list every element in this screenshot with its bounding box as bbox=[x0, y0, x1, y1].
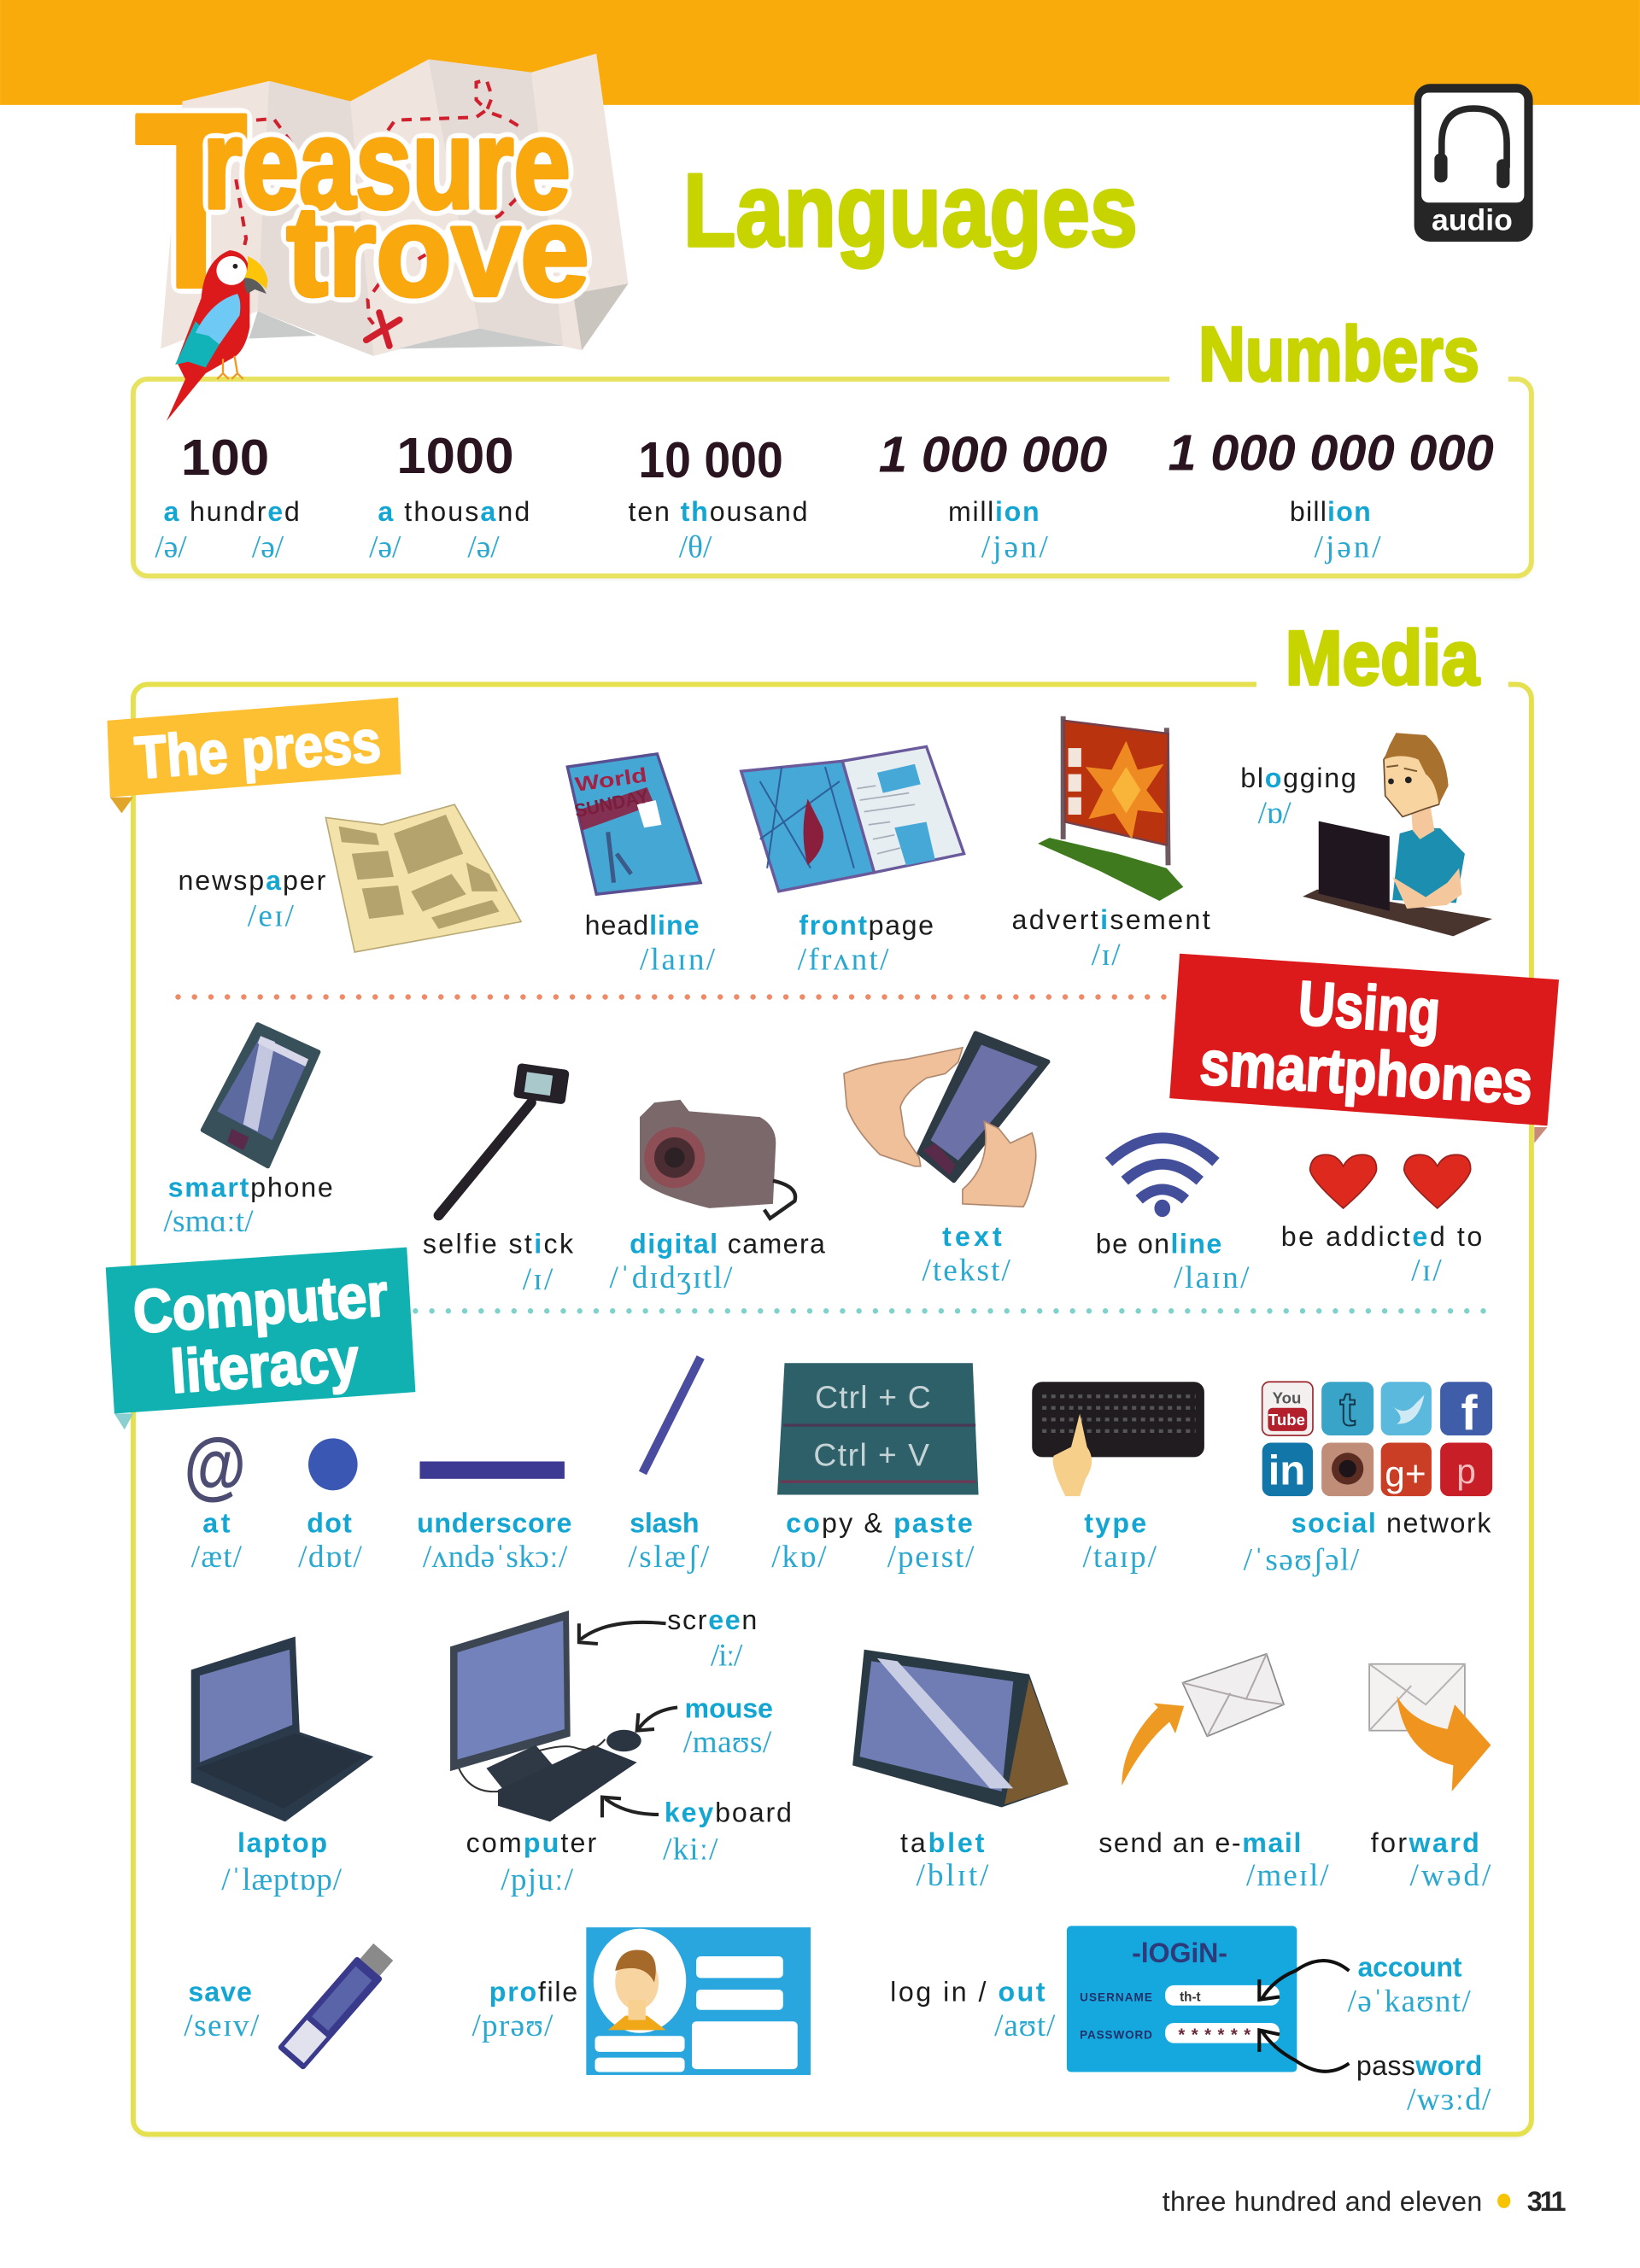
word: password: password bbox=[1356, 2050, 1482, 2081]
icon: keyboard with hand bbox=[1032, 1382, 1204, 1496]
arrow: screen bbox=[579, 1622, 666, 1644]
word: digital camera: digital camera bbox=[630, 1228, 825, 1259]
word: log in / out bbox=[890, 1977, 1056, 2043]
word: slash: slash bbox=[630, 1508, 700, 1539]
icon: login form: th-t bbox=[1180, 1990, 1201, 2005]
icon: social network tiles: Tube bbox=[1268, 1411, 1305, 1429]
word: log in / out: /aʊt/ bbox=[994, 2008, 1056, 2043]
word: underscore: underscore bbox=[417, 1508, 571, 1539]
heading: Numbers: Numbers bbox=[1198, 313, 1479, 398]
banner: The press: The press bbox=[132, 708, 383, 791]
word: save bbox=[184, 1977, 260, 2043]
icon: parrot bbox=[167, 250, 268, 421]
word: million: million bbox=[948, 496, 1040, 527]
word: newspaper: /eɪ/ bbox=[248, 898, 295, 933]
word: be addicted to bbox=[1281, 1221, 1482, 1289]
word: tablet: /blɪt/ bbox=[917, 1858, 989, 1893]
heading: Languages: Languages bbox=[683, 152, 1138, 268]
word: type bbox=[1083, 1508, 1157, 1575]
arrow: account bbox=[1259, 1961, 1349, 2000]
icon: copy and paste keys bbox=[777, 1363, 979, 1494]
word: password bbox=[1356, 2050, 1491, 2118]
word: be online bbox=[1096, 1228, 1250, 1295]
word: screen bbox=[667, 1605, 757, 1673]
icon: tablet bbox=[852, 1650, 1069, 1807]
word: a hundred: /ə/ bbox=[155, 529, 187, 564]
word: send an e-mail: /meɪl/ bbox=[1246, 1858, 1329, 1893]
word: send an e-mail bbox=[1098, 1827, 1329, 1893]
word: profile: profile bbox=[489, 1977, 577, 2008]
decorative orange dots bbox=[178, 996, 1173, 998]
word: laptop: /ˈlæptɒp/ bbox=[221, 1862, 343, 1897]
dashed route bbox=[236, 79, 525, 324]
word: selfie stick bbox=[423, 1228, 574, 1297]
word: a thousand: /ə/ bbox=[467, 529, 500, 564]
icon: social network tiles bbox=[1262, 1382, 1492, 1496]
icon: newspaper bbox=[325, 804, 521, 952]
word: type: /taɪp/ bbox=[1083, 1540, 1157, 1575]
word: at bbox=[191, 1508, 243, 1575]
word: ten thousand: ten thousand bbox=[628, 496, 808, 527]
title: Treasure trove: trove bbox=[287, 180, 589, 323]
word: underscore bbox=[417, 1508, 571, 1575]
icon: USB stick bbox=[277, 1941, 396, 2071]
word: million bbox=[948, 496, 1049, 564]
word: account bbox=[1348, 1952, 1471, 2019]
banner: The press bbox=[107, 698, 401, 813]
word: a thousand: a thousand bbox=[378, 496, 530, 527]
word: a hundred bbox=[155, 496, 300, 564]
icon: login form: ****** bbox=[1178, 2025, 1250, 2044]
word: be addicted to: /ɪ/ bbox=[1411, 1254, 1442, 1289]
word: text: text bbox=[942, 1221, 1002, 1252]
word: account: account bbox=[1358, 1952, 1462, 1983]
word: front page bbox=[798, 910, 934, 977]
word: tablet bbox=[900, 1827, 989, 1893]
icon: at sign: @ bbox=[184, 1422, 246, 1506]
icon: digital camera bbox=[640, 1100, 795, 1219]
icon: login form bbox=[1067, 1926, 1297, 2072]
word: a thousand bbox=[369, 496, 530, 564]
word: text: /tekst/ bbox=[922, 1254, 1010, 1289]
word: headline: headline bbox=[585, 910, 700, 941]
icon: audio badge bbox=[1414, 84, 1533, 242]
word: slash: /slæʃ/ bbox=[628, 1540, 710, 1575]
word: ten thousand bbox=[628, 496, 808, 564]
word: million: /jən/ bbox=[981, 529, 1049, 564]
treasure map bbox=[161, 54, 628, 356]
word: copy and paste bbox=[771, 1508, 975, 1575]
word: keyboard: keyboard bbox=[665, 1797, 792, 1827]
word: dot: dot bbox=[307, 1508, 352, 1539]
word: advertisement: /ɪ/ bbox=[1092, 938, 1121, 973]
number: 1000: 1000 bbox=[396, 427, 514, 484]
word: at: /æt/ bbox=[191, 1540, 243, 1575]
icon: login form: USERNAME bbox=[1080, 1991, 1152, 2004]
title: Treasure trove: T bbox=[135, 61, 248, 340]
word: smartphone: /smɑːt/ bbox=[164, 1204, 254, 1239]
word: computer bbox=[466, 1827, 596, 1897]
media panel bbox=[133, 665, 1532, 2137]
word: newspaper bbox=[178, 865, 326, 933]
icon: login form: -lOGiN- bbox=[1132, 1938, 1227, 1968]
word: selfie stick: /ɪ/ bbox=[523, 1262, 554, 1297]
word: mouse: /maʊs/ bbox=[683, 1725, 772, 1760]
icon: magazine: World bbox=[574, 764, 648, 797]
icon: forward e-mail bbox=[1369, 1664, 1491, 1792]
word: type: type bbox=[1084, 1508, 1146, 1539]
banner: Computer literacy bbox=[106, 1248, 415, 1429]
icon: social network tiles: g+ bbox=[1385, 1453, 1426, 1493]
word: profile: /prəʊ/ bbox=[472, 2008, 554, 2043]
orange header band bbox=[0, 0, 1640, 105]
word: copy and paste: /kɒ/ bbox=[771, 1540, 827, 1575]
word: social network: /ˈsəʊʃəl/ bbox=[1244, 1543, 1360, 1578]
title: Treasure trove: reasure bbox=[202, 92, 571, 235]
word: mouse: mouse bbox=[685, 1692, 773, 1723]
word: be online: /laɪn/ bbox=[1174, 1260, 1250, 1295]
word: laptop bbox=[221, 1827, 343, 1897]
word: front page: /frʌnt/ bbox=[798, 942, 889, 977]
banner: Computer literacy: literacy bbox=[168, 1326, 361, 1406]
footer: page number: three hundred and eleven bbox=[1163, 2186, 1482, 2217]
word: laptop: laptop bbox=[237, 1827, 327, 1858]
icon: social network tiles: in bbox=[1268, 1448, 1305, 1494]
icon: hearts bbox=[1310, 1154, 1471, 1208]
word: headline bbox=[585, 910, 716, 977]
word: newspaper: newspaper bbox=[178, 865, 326, 896]
icon: hand holding phone bbox=[844, 1033, 1048, 1207]
word: advertisement: advertisement bbox=[1012, 904, 1210, 935]
word: ten thousand: /θ/ bbox=[679, 529, 712, 564]
word: save: save bbox=[188, 1977, 252, 2008]
icon: person blogging bbox=[1303, 733, 1492, 936]
word: selfie stick: selfie stick bbox=[423, 1228, 574, 1259]
icon: social network tiles: p bbox=[1456, 1452, 1476, 1491]
word: log in / out: log in / out bbox=[890, 1977, 1046, 2008]
arrow: keyboard bbox=[602, 1797, 659, 1817]
number: 1 000 000 000: 1 000 000 000 bbox=[1168, 424, 1494, 482]
arrow: password bbox=[1259, 2030, 1349, 2072]
word: computer: computer bbox=[466, 1827, 596, 1858]
word: text bbox=[922, 1221, 1010, 1289]
word: social network bbox=[1244, 1508, 1491, 1578]
arrow: mouse bbox=[637, 1708, 677, 1731]
word: smartphone: smartphone bbox=[168, 1172, 333, 1202]
number: 10 000: 10 000 bbox=[638, 431, 783, 488]
icon: social network tiles: You bbox=[1273, 1389, 1301, 1407]
banner: Using smartphones: smartphones bbox=[1198, 1028, 1534, 1118]
icon: social network tiles: f bbox=[1461, 1386, 1478, 1441]
footer: page number: 311 bbox=[1527, 2186, 1567, 2217]
word: billion: billion bbox=[1290, 496, 1371, 527]
number: 100: 100 bbox=[181, 429, 269, 486]
icon: selfie stick bbox=[438, 1063, 570, 1215]
word: screen: screen bbox=[667, 1605, 757, 1635]
icon: wifi bbox=[1109, 1138, 1215, 1217]
numbers panel bbox=[133, 362, 1532, 579]
word: dot bbox=[298, 1508, 362, 1575]
word: blogging: /ɒ/ bbox=[1258, 796, 1292, 831]
word: forward bbox=[1371, 1827, 1491, 1893]
word: blogging bbox=[1240, 763, 1356, 831]
decorative teal dots bbox=[415, 1309, 1488, 1312]
icon: underscore bbox=[419, 1461, 565, 1479]
icon: magazine: SUNDAY bbox=[572, 785, 651, 821]
icon: slash bbox=[642, 1357, 700, 1473]
word: digital camera: /ˈdɪdʒɪtl/ bbox=[609, 1260, 733, 1295]
word: send an e-mail: send an e-mail bbox=[1098, 1827, 1301, 1858]
word: password: /wɜːd/ bbox=[1407, 2083, 1491, 2118]
word: profile bbox=[472, 1977, 577, 2043]
word: billion: /jən/ bbox=[1315, 529, 1381, 564]
word: tablet: tablet bbox=[900, 1827, 985, 1858]
icon: copy and paste keys: Ctrl + C bbox=[815, 1379, 931, 1415]
word: underscore: /ʌndəˈskɔː/ bbox=[423, 1540, 568, 1575]
word: a hundred: /ə/ bbox=[252, 529, 284, 564]
word: mouse bbox=[683, 1692, 773, 1760]
dash inside letter o bbox=[419, 254, 425, 259]
icon: send e-mail bbox=[1122, 1654, 1284, 1786]
word: forward: forward bbox=[1371, 1827, 1479, 1858]
word: at: at bbox=[202, 1508, 231, 1539]
icon: magazine bbox=[567, 754, 700, 894]
X mark bbox=[366, 313, 400, 346]
word: front page: frontpage bbox=[799, 910, 934, 941]
word: a hundred: a hundred bbox=[164, 496, 300, 527]
word: be addicted to: be addicted to bbox=[1281, 1221, 1482, 1252]
word: dot: /dɒt/ bbox=[298, 1540, 362, 1575]
title: Treasure trove bbox=[135, 61, 589, 340]
icon: computer bbox=[450, 1610, 641, 1821]
icon: dot bbox=[308, 1438, 358, 1490]
word: forward: /wəd/ bbox=[1410, 1858, 1491, 1893]
word: copy and paste: /peɪst/ bbox=[887, 1540, 975, 1575]
word: billion bbox=[1290, 496, 1381, 564]
word: smartphone bbox=[164, 1172, 333, 1239]
word: save: /seɪv/ bbox=[184, 2008, 260, 2043]
banner: Using smartphones: Using bbox=[1296, 968, 1443, 1048]
word: a thousand: /ə/ bbox=[369, 529, 401, 564]
word: advertisement bbox=[1012, 904, 1210, 973]
banner: Computer literacy: Computer bbox=[131, 1261, 390, 1347]
icon: audio badge: audio bbox=[1432, 202, 1513, 237]
word: digital camera bbox=[609, 1228, 825, 1295]
word: keyboard bbox=[663, 1797, 792, 1867]
banner: Using smartphones bbox=[1169, 954, 1559, 1143]
word: blogging: blogging bbox=[1240, 763, 1356, 793]
icon: laptop bbox=[191, 1637, 373, 1821]
icon: smartphone bbox=[202, 1025, 319, 1166]
word: be online: be online bbox=[1096, 1228, 1221, 1259]
icon: front page bbox=[741, 746, 964, 891]
word: account: /əˈkaʊnt/ bbox=[1348, 1984, 1471, 2019]
icon: copy and paste keys: Ctrl + V bbox=[813, 1437, 929, 1473]
icon: login form: PASSWORD bbox=[1080, 2029, 1152, 2042]
number: 1 000 000: 1 000 000 bbox=[879, 425, 1107, 482]
word: slash bbox=[628, 1508, 710, 1575]
heading: Media: Media bbox=[1286, 617, 1480, 702]
word: headline: /laɪn/ bbox=[640, 942, 716, 977]
word: keyboard: /kiː/ bbox=[663, 1832, 718, 1867]
icon: social network tiles: t bbox=[1339, 1382, 1356, 1435]
icon: profile card bbox=[586, 1927, 811, 2075]
icon: billboard bbox=[1038, 716, 1183, 901]
word: social network: social network bbox=[1292, 1508, 1491, 1539]
word: copy and paste: copy & paste bbox=[786, 1508, 973, 1539]
word: screen: /iː/ bbox=[711, 1638, 743, 1673]
word: computer: /pjuː/ bbox=[501, 1862, 574, 1897]
